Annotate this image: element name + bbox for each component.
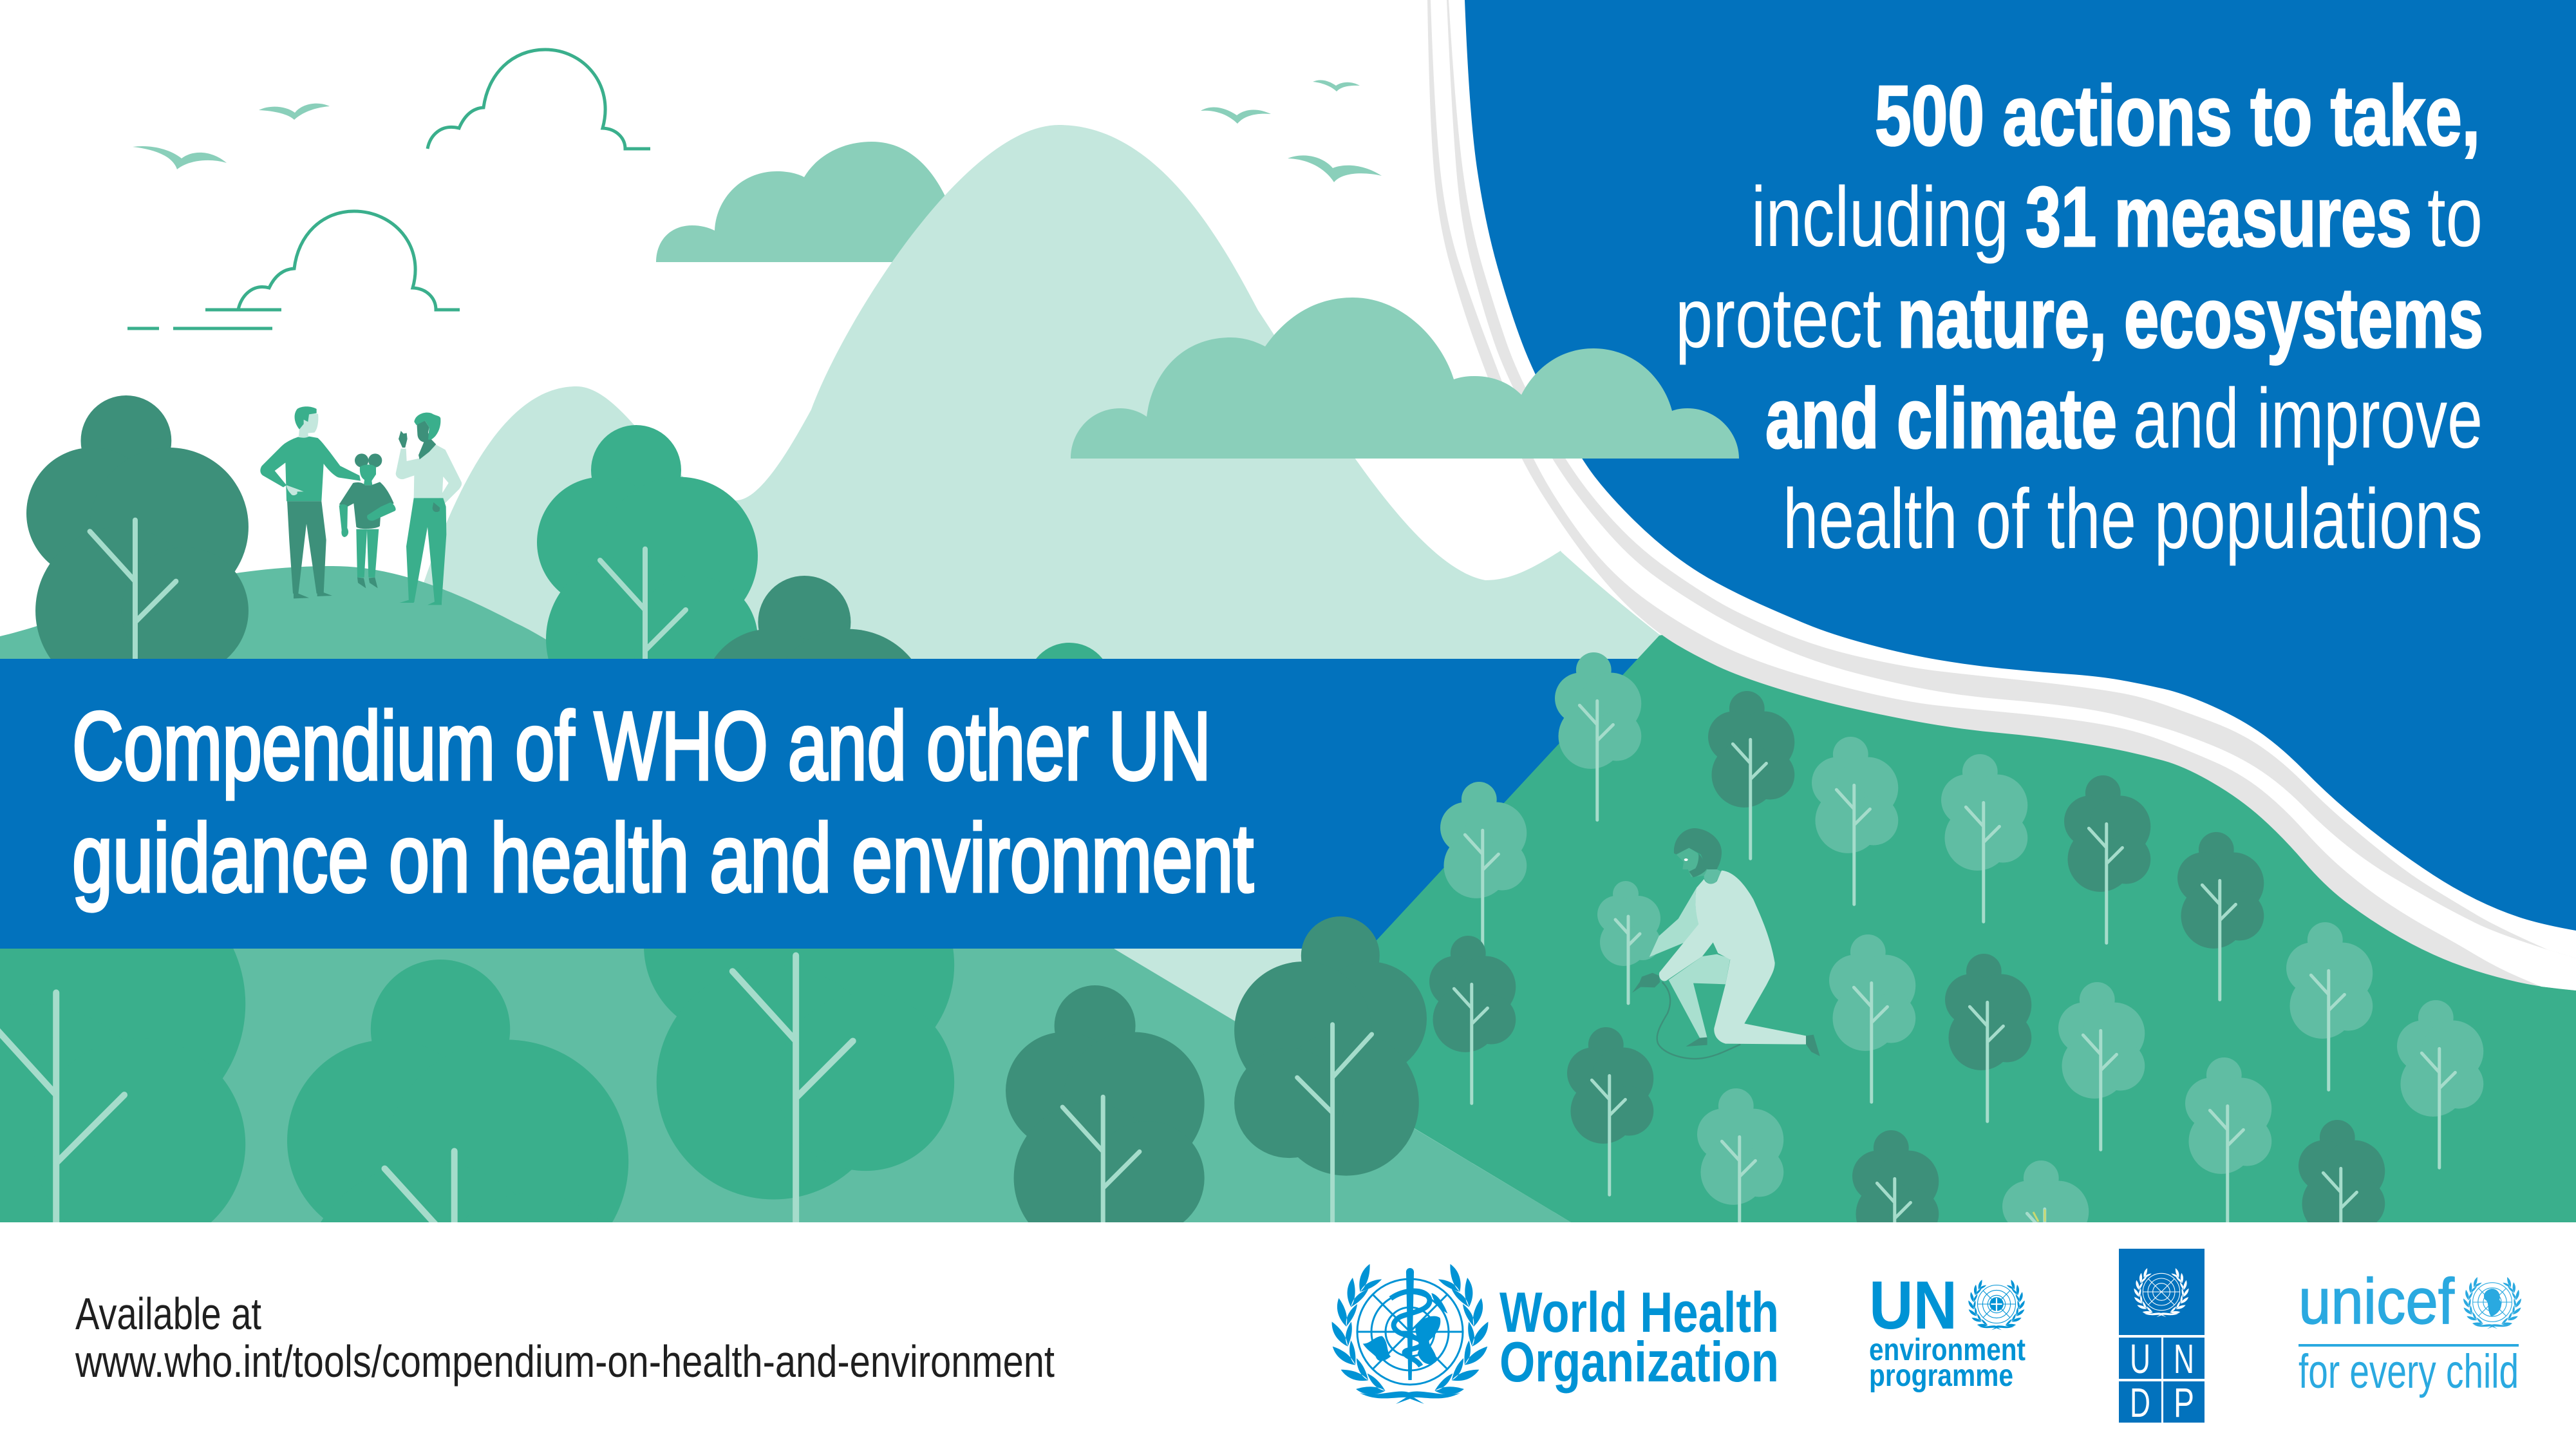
curled page edge with blue panel (1427, 0, 2576, 990)
UNDP letters: U (2130, 1336, 2150, 1382)
outline cloud lower with horizon lines (127, 211, 460, 328)
footer band (0, 1222, 2576, 1449)
key message text: and climate (1765, 371, 2117, 466)
upper trees behind banner (26, 395, 1163, 1046)
WHO wordmark: World Health (1500, 1280, 1779, 1344)
large lower-left trees (0, 781, 954, 1419)
UNEP wordmark: programme (1869, 1359, 2013, 1393)
logo: UN environment programme (1869, 1267, 2026, 1393)
icon: unicef emblem (2463, 1277, 2521, 1329)
logo: unicef: unicef (2299, 1265, 2454, 1338)
availability text: Available at (75, 1289, 261, 1339)
kneeling man planting a tree (1632, 828, 1820, 1059)
WHO wordmark (1500, 1280, 1779, 1394)
key message text: to (2427, 169, 2483, 264)
man (260, 406, 361, 598)
lower foreground ground (0, 949, 1571, 1222)
UNDP letters: N (2174, 1336, 2194, 1382)
logo: UNDP (2119, 1249, 2205, 1426)
woman (396, 413, 462, 605)
WHO wordmark: Organization (1500, 1330, 1779, 1394)
birds (133, 80, 1382, 182)
green planting hill (1278, 580, 2576, 1222)
banner title (72, 692, 1254, 912)
logo: UN environment programme: UN (1869, 1267, 1957, 1343)
banner title: guidance on health and environment (72, 804, 1254, 912)
key message text: including (1751, 169, 2009, 264)
logo: World Health Organization (1331, 1264, 1779, 1404)
UNDP letters: P (2174, 1379, 2194, 1426)
UNDP letters (2130, 1336, 2194, 1426)
icon: UN environment emblem (1968, 1280, 2025, 1330)
key message text (1675, 68, 2483, 566)
banner title: Compendium of WHO and other UN (72, 692, 1211, 800)
icon: WHO emblem (1331, 1264, 1489, 1404)
outline cloud upper (428, 50, 650, 149)
UNEP wordmark: environment (1869, 1333, 2026, 1367)
blue title banner (0, 659, 1674, 949)
dark foreground trees (1006, 916, 1427, 1370)
child (339, 453, 396, 588)
key message text: 31 measures (2026, 169, 2412, 264)
availability text: www.who.int/tools/compendium-on-health-and-environment (75, 1336, 1055, 1387)
UNDP letters: D (2130, 1379, 2150, 1426)
cloud behind mountain (656, 142, 950, 262)
key message text: protect (1675, 270, 1881, 365)
availability text (75, 1289, 1055, 1387)
UNEP wordmark (1869, 1333, 2026, 1393)
logo: unicef (2299, 1265, 2521, 1398)
large cloud over mountain and page edge (1071, 298, 1739, 459)
mountains (412, 125, 1738, 1224)
hill with family (0, 566, 599, 670)
forest of small trees on the hill (1429, 652, 2483, 1328)
family of three on the hill (260, 406, 462, 605)
icon: UN emblem white (2134, 1268, 2189, 1317)
